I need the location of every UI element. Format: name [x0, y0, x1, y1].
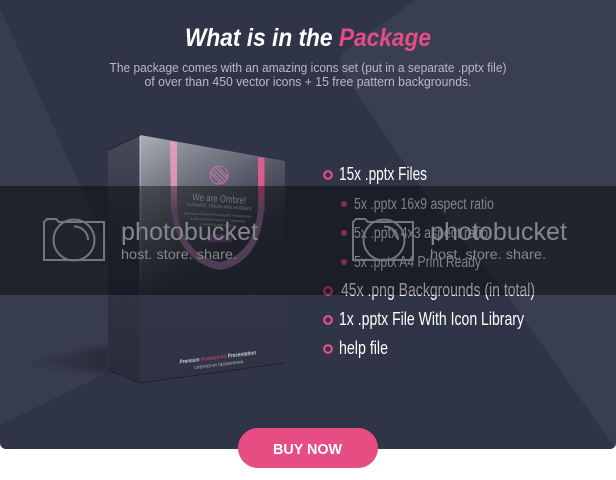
box text: marketing and creative — [200, 222, 236, 228]
watermark logo left — [44, 219, 104, 260]
buy now button — [238, 428, 378, 468]
watermark text right — [430, 218, 567, 262]
list item: A4: 5x .pptx A4 Print Ready — [354, 254, 481, 271]
title: What is in the Package — [185, 24, 431, 52]
watermark text right: host. store. share. — [430, 246, 546, 262]
box caption: CREATED BY DESIGNVESIM — [194, 360, 243, 370]
list item: 15x pptx files — [324, 164, 427, 184]
box text: to fits all kind of business, corporate, — [190, 217, 246, 223]
background facet: right — [339, 0, 616, 449]
box text — [184, 192, 252, 228]
buy now button: BUY NOW — [273, 442, 342, 458]
watermark text left: host. store. share. — [121, 246, 237, 262]
list item: 15x pptx files: 15x .pptx Files — [339, 164, 427, 184]
list item: help file — [324, 338, 388, 358]
list — [324, 164, 535, 358]
watermark band — [0, 186, 616, 295]
watermark text left: photobucket — [121, 218, 258, 246]
subtitle text: The package comes with an amazing icons set (put in a separate .pptx file) — [110, 61, 506, 75]
box front face — [140, 135, 285, 280]
box small button — [207, 234, 232, 242]
box logo — [210, 166, 228, 184]
subtitle text — [110, 61, 506, 89]
box caption: Premium Powerpoint Presentation — [179, 350, 257, 366]
box text: We are Ombre! — [192, 192, 246, 207]
box text: Business Oriented Powerpoint Presentation — [184, 211, 252, 219]
box side face — [108, 135, 140, 383]
box text: ULTIMATE, FRESH AND MODERN — [187, 202, 252, 211]
list item: 4x3: 5x .pptx 4x3 aspect ratio — [354, 225, 488, 242]
watermark text left — [121, 218, 258, 262]
pink ribbon — [170, 141, 264, 270]
watermark text right: photobucket — [430, 218, 567, 246]
list item: 16x9: 5x .pptx 16x9 aspect ratio — [354, 196, 494, 213]
box cast shadow — [50, 346, 108, 374]
watermark logo right — [353, 219, 413, 260]
product box — [108, 130, 286, 390]
background facet: left — [0, 8, 130, 425]
subtitle text: of over than 450 vector icons + 15 free pattern backgrounds. — [144, 75, 472, 89]
list item: png backgrounds: 45x .png Backgrounds (in total) — [341, 280, 535, 300]
list item: help file: help file — [339, 338, 388, 358]
list item: icon library: 1x .pptx File With Icon Library — [339, 309, 524, 329]
